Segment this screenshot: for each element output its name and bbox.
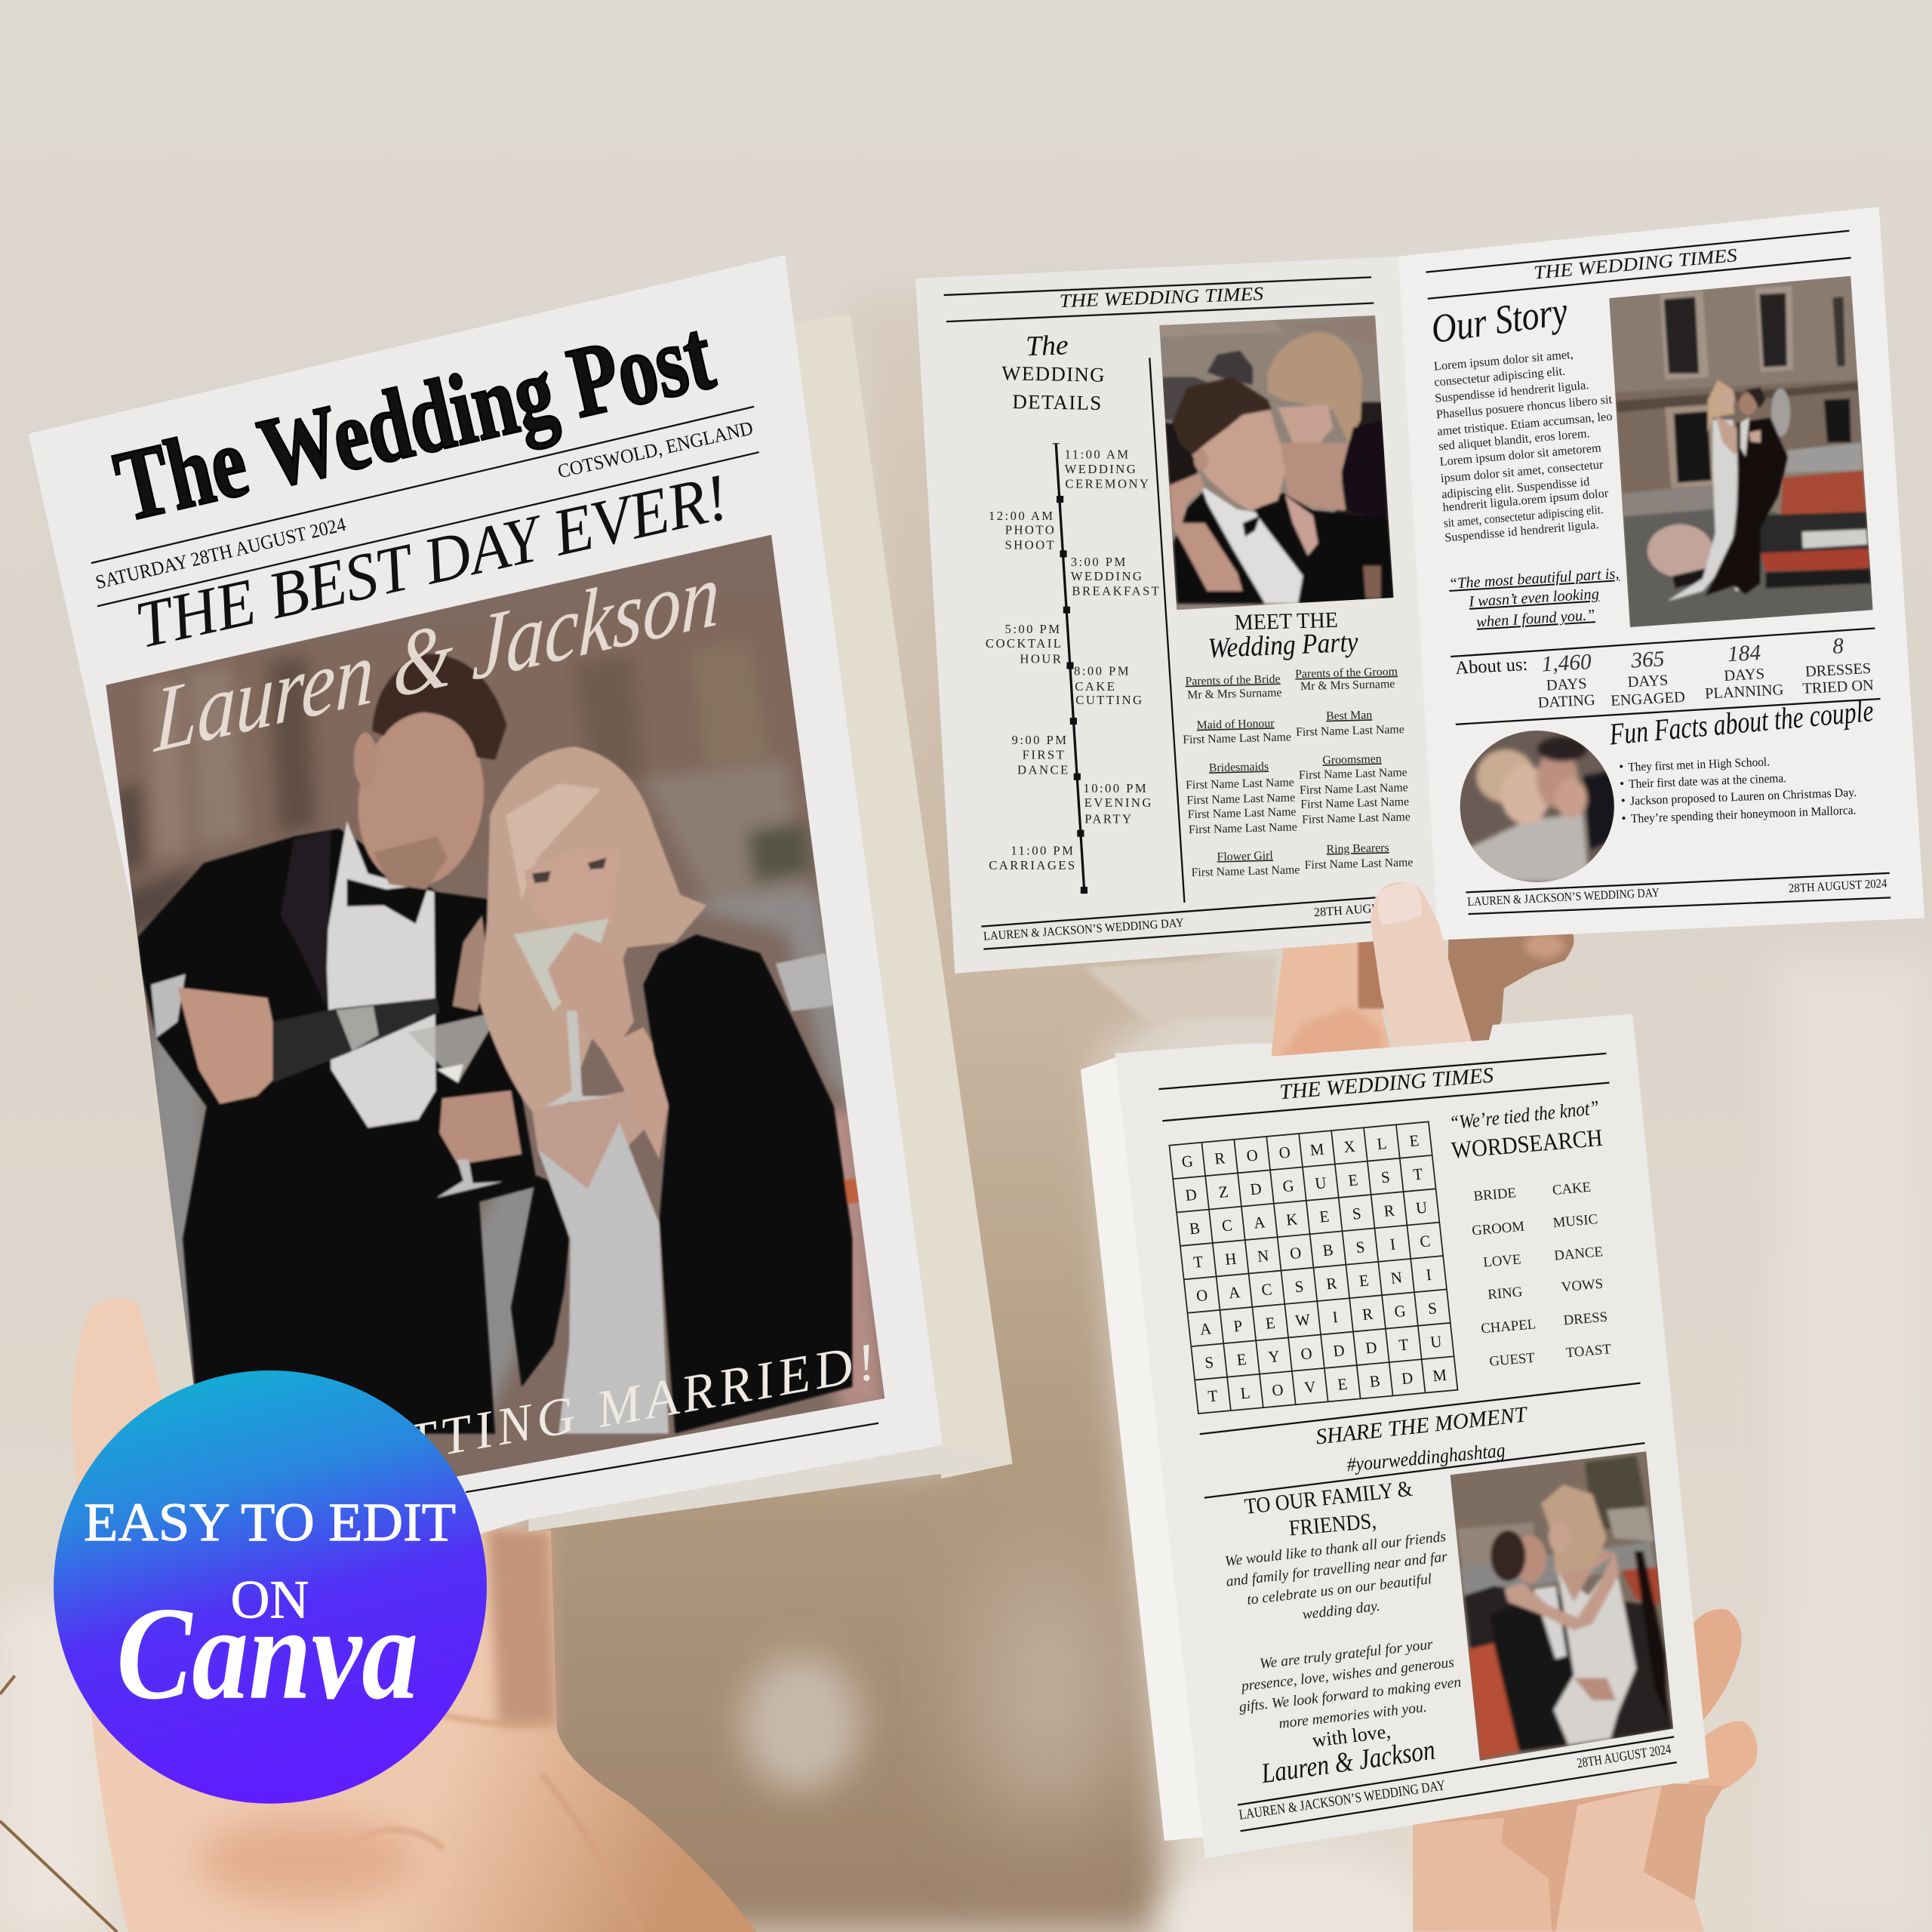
story paragraph: amet tristique. Etiam accumsan, leo bbox=[1437, 409, 1613, 438]
wordsearch grid: E bbox=[1358, 1271, 1370, 1291]
wordsearch grid: W bbox=[1294, 1310, 1311, 1330]
location: COTSWOLD, ENGLAND bbox=[555, 417, 755, 482]
word list: LOVE bbox=[1483, 1251, 1521, 1271]
footer names: LAUREN & JACKSON’S WEDDING DAY bbox=[983, 915, 1184, 943]
word list: GUEST bbox=[1489, 1350, 1536, 1370]
timeline labels: BREAKFAST bbox=[1072, 584, 1161, 598]
wordsearch grid: K bbox=[1285, 1210, 1299, 1229]
dried grass stalk bbox=[0, 1675, 117, 1932]
wordsearch grid: T bbox=[1398, 1335, 1410, 1355]
wordsearch grid: C bbox=[1221, 1216, 1233, 1235]
wordsearch grid: O bbox=[1300, 1344, 1313, 1363]
wordsearch heading: WORDSEARCH bbox=[1451, 1124, 1604, 1164]
wordsearch grid: E bbox=[1408, 1131, 1420, 1150]
badge: easy to edit on Canva bbox=[54, 1371, 487, 1804]
about us stats: 184 bbox=[1727, 641, 1761, 666]
wedding party names: First Name Last Name bbox=[1183, 731, 1291, 746]
timeline labels: 3:00 PM bbox=[1071, 555, 1128, 569]
word list: CAKE bbox=[1552, 1180, 1592, 1198]
hand fingers behind spread bbox=[1270, 928, 1574, 1069]
wordsearch grid: R bbox=[1361, 1304, 1374, 1324]
fun facts list: They first met in High School. bbox=[1628, 755, 1770, 774]
meet the party heading: Wedding Party bbox=[1208, 627, 1359, 664]
wordsearch grid: D bbox=[1401, 1368, 1414, 1388]
timeline labels: PARTY bbox=[1084, 811, 1134, 826]
story paragraph: Suspendisse id hendrerit ligula. bbox=[1434, 377, 1589, 405]
circular kiss photo bbox=[1460, 731, 1614, 882]
greeting heading: FRIENDS, bbox=[1288, 1509, 1377, 1541]
story paragraph: Phasellus posuere rhoncus libero sit bbox=[1435, 392, 1613, 421]
wordsearch grid: D bbox=[1184, 1185, 1198, 1204]
wedding party names: First Name Last Name bbox=[1304, 856, 1414, 872]
wordsearch grid: B bbox=[1189, 1219, 1201, 1238]
our story heading: Our Story bbox=[1429, 288, 1571, 352]
wordsearch grid: B bbox=[1321, 1241, 1334, 1260]
word list: DANCE bbox=[1553, 1244, 1604, 1264]
header rules bbox=[1426, 231, 1851, 299]
wedding party names: First Name Last Name bbox=[1189, 820, 1297, 836]
wordsearch grid: O bbox=[1271, 1380, 1284, 1400]
word list: GROOM bbox=[1471, 1219, 1525, 1239]
about us stats bbox=[1455, 634, 1875, 712]
stats rules bbox=[1451, 628, 1881, 724]
masthead: The Wedding Post bbox=[106, 298, 723, 543]
word list: MUSIC bbox=[1552, 1211, 1598, 1231]
thank you message bbox=[1224, 1529, 1462, 1732]
column divider bbox=[1149, 358, 1184, 903]
wordsearch grid: C bbox=[1260, 1280, 1273, 1299]
thank you message: to celebrate us on our beautiful bbox=[1246, 1571, 1433, 1608]
story paragraph: Lorem ipsum dolor sit ametorem bbox=[1439, 440, 1602, 469]
wedding party names: First Name Last Name bbox=[1296, 723, 1404, 739]
wordsearch grid: V bbox=[1303, 1377, 1317, 1397]
about us stats: About us: bbox=[1455, 654, 1528, 678]
fun facts list: • bbox=[1622, 811, 1626, 826]
wordsearch grid: E bbox=[1265, 1313, 1276, 1333]
thank you message: and family for travelling near and far bbox=[1226, 1549, 1448, 1590]
wordsearch grid: L bbox=[1376, 1134, 1388, 1153]
wordsearch grid: S bbox=[1380, 1168, 1391, 1186]
details heading bbox=[1001, 330, 1106, 414]
thumb over the spread bbox=[1371, 882, 1474, 1054]
fringed ribbon behind spread bbox=[1084, 955, 1275, 1020]
masthead rules bbox=[91, 407, 759, 606]
pull quote: I wasn’t even looking bbox=[1468, 586, 1599, 611]
photo with car bbox=[1451, 1451, 1674, 1761]
wordsearch grid: X bbox=[1343, 1137, 1356, 1156]
story paragraph: hendrerit ligula.orem ipsum dolor bbox=[1442, 485, 1609, 515]
wordsearch grid: O bbox=[1245, 1146, 1259, 1165]
about us stats: ENGAGED bbox=[1611, 689, 1685, 709]
wordsearch grid: C bbox=[1419, 1232, 1432, 1251]
timeline labels bbox=[986, 447, 1161, 872]
timeline labels: 8:00 PM bbox=[1074, 664, 1131, 678]
right hand behind back page bbox=[1413, 1609, 1757, 1931]
wordsearch grid: H bbox=[1224, 1249, 1238, 1269]
timeline labels: WEDDING bbox=[1071, 569, 1143, 583]
story paragraph: Suspendisse id hendrerit ligula. bbox=[1444, 517, 1599, 545]
wedding party names: First Name Last Name bbox=[1191, 863, 1300, 879]
header rules bbox=[1158, 1054, 1609, 1121]
wordsearch grid: P bbox=[1232, 1316, 1243, 1336]
wordsearch grid: I bbox=[1389, 1235, 1396, 1254]
badge Canva wordmark: Canva bbox=[116, 1580, 418, 1727]
wordsearch grid: T bbox=[1412, 1164, 1423, 1184]
timeline labels: EVENING bbox=[1084, 795, 1153, 810]
header title: THE WEDDING TIMES bbox=[1059, 283, 1264, 312]
wordsearch grid: S bbox=[1355, 1238, 1366, 1257]
wordsearch grid: O bbox=[1289, 1244, 1302, 1263]
greeting heading bbox=[1244, 1477, 1414, 1541]
about us stats: DATING bbox=[1537, 692, 1596, 712]
wordsearch grid: S bbox=[1352, 1204, 1362, 1223]
wedding party names: Best Man bbox=[1326, 709, 1372, 723]
wedding party names: Maid of Honour bbox=[1196, 717, 1275, 732]
wordsearch grid: T bbox=[1192, 1252, 1204, 1272]
timeline labels: 12:00 AM bbox=[989, 509, 1055, 523]
word list: BRIDE bbox=[1473, 1185, 1517, 1204]
wordsearch grid bbox=[1169, 1121, 1457, 1414]
wedding party names: First Name Last Name bbox=[1302, 811, 1411, 826]
footer rules bbox=[981, 897, 1376, 949]
wordsearch grid: G bbox=[1281, 1177, 1295, 1195]
wedding party names: First Name Last Name bbox=[1299, 766, 1407, 782]
footer names: LAUREN & JACKSON’S WEDDING DAY bbox=[1467, 885, 1660, 909]
footer date: 28TH AUGUST 2024 bbox=[1313, 897, 1423, 919]
wordsearch grid: M bbox=[1309, 1140, 1325, 1159]
about us stats: DAYS bbox=[1546, 675, 1587, 694]
wedding party names: Mr & Mrs Surname bbox=[1300, 678, 1395, 693]
word list: DRESS bbox=[1563, 1309, 1608, 1329]
timeline labels: CARRIAGES bbox=[989, 858, 1077, 872]
wordsearch grid: E bbox=[1337, 1374, 1348, 1394]
story paragraph: sit amet, consectetur adipiscing elit. bbox=[1443, 502, 1604, 530]
panel: back page stack bbox=[1081, 1014, 1709, 1858]
wordsearch grid: L bbox=[1239, 1383, 1251, 1403]
wordsearch grid: N bbox=[1257, 1246, 1269, 1266]
wordsearch grid: M bbox=[1432, 1365, 1447, 1385]
about us stats: DRESSES bbox=[1804, 660, 1872, 680]
timeline labels: CAKE bbox=[1075, 679, 1116, 694]
story paragraph bbox=[1433, 347, 1613, 545]
pull quote bbox=[1448, 565, 1620, 631]
bottom rule bbox=[466, 1423, 878, 1492]
greeting heading: TO OUR FAMILY & bbox=[1244, 1477, 1414, 1519]
fun facts list: • bbox=[1620, 777, 1624, 791]
wordsearch grid: S bbox=[1294, 1277, 1304, 1296]
hashtag: #yourweddinghashtag bbox=[1346, 1439, 1506, 1476]
wedding party names: Ring Bearers bbox=[1326, 841, 1389, 856]
panel: inside spread, left page bbox=[915, 257, 1438, 974]
wordsearch grid: A bbox=[1228, 1283, 1241, 1302]
date: SATURDAY 28TH AUGUST 2024 bbox=[94, 513, 348, 593]
wordsearch grid: N bbox=[1390, 1268, 1403, 1287]
tied the knot: “We’re tied the knot” bbox=[1448, 1097, 1600, 1134]
thank you message: gifts. We look forward to making even bbox=[1238, 1675, 1462, 1715]
footer date: 28TH AUGUST 2024 bbox=[1576, 1741, 1672, 1770]
wordsearch grid: S bbox=[1204, 1353, 1214, 1372]
wedding party names: First Name Last Name bbox=[1186, 792, 1295, 807]
header title: THE WEDDING TIMES bbox=[1533, 245, 1738, 284]
badge line two: ON bbox=[231, 1570, 309, 1630]
wordsearch grid: D bbox=[1332, 1341, 1346, 1360]
timeline labels: 9:00 PM bbox=[1012, 733, 1069, 747]
share the moment: SHARE THE MOMENT bbox=[1315, 1402, 1530, 1450]
wordsearch grid: A bbox=[1199, 1319, 1213, 1339]
headline: THE BEST DAY EVER! bbox=[129, 460, 734, 663]
panel: inside spread, right page bbox=[1398, 207, 1924, 940]
sub headline: GETTING MARRIED! bbox=[323, 1331, 884, 1487]
fun facts list bbox=[1619, 755, 1857, 826]
wordsearch grid: I bbox=[1331, 1308, 1339, 1327]
timeline labels: 5:00 PM bbox=[1005, 622, 1062, 636]
badge line one: EASY TO EDIT bbox=[84, 1492, 456, 1552]
details heading: WEDDING bbox=[1001, 361, 1106, 386]
wedding party names: Bridesmaids bbox=[1209, 760, 1269, 774]
wedding party names: Mr & Mrs Surname bbox=[1187, 686, 1282, 702]
thank you message: wedding day. bbox=[1302, 1598, 1381, 1623]
timeline labels: COCKTAIL bbox=[986, 636, 1063, 651]
about us stats: TRIED ON bbox=[1802, 677, 1875, 697]
wedding party names: Flower Girl bbox=[1217, 849, 1274, 863]
wordsearch grid: O bbox=[1278, 1143, 1291, 1162]
timeline labels: WEDDING bbox=[1065, 462, 1137, 476]
thank you message: presence, love, wishes and generous bbox=[1239, 1655, 1455, 1695]
about us stats: PLANNING bbox=[1705, 681, 1784, 703]
meet the party heading bbox=[1208, 608, 1359, 664]
timeline labels: CEREMONY bbox=[1065, 477, 1150, 491]
timeline labels: 11:00 PM bbox=[1011, 844, 1075, 858]
wedding party names: First Name Last Name bbox=[1188, 805, 1297, 821]
story paragraph: ipsum dolor sit amet, consectetur bbox=[1440, 457, 1604, 485]
couple names: Lauren & Jackson bbox=[152, 541, 721, 773]
wedding party names: First Name Last Name bbox=[1300, 795, 1409, 811]
wordsearch grid: G bbox=[1393, 1302, 1407, 1321]
about us stats: 8 bbox=[1832, 634, 1844, 659]
thank you message: We are truly grateful for your bbox=[1259, 1637, 1434, 1672]
timeline labels: 11:00 AM bbox=[1065, 447, 1131, 461]
about us stats: 365 bbox=[1630, 647, 1665, 673]
header rules bbox=[944, 277, 1374, 321]
thank you message: more memories with you. bbox=[1278, 1700, 1428, 1732]
timeline labels: HOUR bbox=[1020, 651, 1063, 666]
footer rules bbox=[1466, 873, 1890, 914]
fun facts list: • bbox=[1619, 760, 1623, 774]
wordsearch grid: A bbox=[1253, 1213, 1266, 1232]
wordsearch grid: I bbox=[1425, 1266, 1432, 1284]
timeline labels: PHOTO bbox=[1005, 523, 1056, 537]
fun facts list: • bbox=[1621, 793, 1626, 808]
wordsearch grid: U bbox=[1429, 1332, 1443, 1352]
wordsearch grid: D bbox=[1364, 1338, 1378, 1358]
wordsearch grid: R bbox=[1383, 1201, 1396, 1220]
meet the party heading: MEET THE bbox=[1234, 608, 1338, 635]
wordsearch grid: U bbox=[1415, 1198, 1428, 1217]
wordsearch grid: T bbox=[1207, 1386, 1219, 1405]
about us stats: DAYS bbox=[1627, 672, 1669, 691]
wordsearch grid: R bbox=[1214, 1149, 1226, 1168]
word list: TOAST bbox=[1565, 1341, 1612, 1361]
wordsearch grid: E bbox=[1236, 1350, 1247, 1369]
wedding party names: First Name Last Name bbox=[1186, 776, 1294, 792]
story paragraph: Lorem ipsum dolor sit amet, bbox=[1433, 347, 1574, 374]
signature: Lauren & Jackson bbox=[1259, 1734, 1437, 1789]
timeline labels: FIRST bbox=[1023, 748, 1066, 762]
share rules bbox=[1200, 1383, 1644, 1498]
thank you message: We would like to thank all our friends bbox=[1224, 1529, 1447, 1570]
pull quote: when I found you.” bbox=[1476, 607, 1595, 631]
wordsearch grid: B bbox=[1369, 1371, 1381, 1391]
wordsearch grid: U bbox=[1314, 1174, 1327, 1192]
wordsearch grid: Z bbox=[1218, 1183, 1229, 1201]
word list: CHAPEL bbox=[1480, 1316, 1537, 1337]
wedding party names: Parents of the Bride bbox=[1185, 672, 1281, 688]
story paragraph: adipiscing elit. Suspendisse id bbox=[1441, 474, 1590, 501]
pull quote: “The most beautiful part is, bbox=[1448, 565, 1620, 592]
wordsearch grid: O bbox=[1195, 1286, 1208, 1305]
panel: front page The Wedding Post bbox=[29, 255, 1013, 1593]
woman bbox=[479, 746, 707, 1112]
story paragraph: sed aliquet blandit, eros lorem. bbox=[1438, 426, 1590, 454]
wordsearch grid: S bbox=[1427, 1299, 1438, 1318]
timeline labels: 10:00 PM bbox=[1083, 781, 1148, 795]
front card back page bbox=[792, 314, 1013, 1478]
fun facts list: Their first date was at the cinema. bbox=[1629, 771, 1786, 791]
fun facts list: Jackson proposed to Lauren on Christmas Day. bbox=[1630, 785, 1857, 808]
word list bbox=[1471, 1180, 1612, 1370]
about us stats: DAYS bbox=[1724, 666, 1765, 685]
wordsearch grid: D bbox=[1249, 1180, 1263, 1198]
footer names: LAUREN & JACKSON’S WEDDING DAY bbox=[1238, 1777, 1447, 1823]
timeline labels: CUTTING bbox=[1075, 693, 1143, 707]
wordsearch grid: R bbox=[1325, 1274, 1338, 1294]
word list: RING bbox=[1487, 1284, 1523, 1303]
wedding party names: First Name Last Name bbox=[1300, 781, 1408, 797]
footer rules bbox=[1238, 1737, 1677, 1831]
timeline bbox=[1052, 444, 1087, 894]
wordsearch grid: G bbox=[1181, 1152, 1194, 1171]
footer date: 28TH AUGUST 2024 bbox=[1789, 876, 1887, 895]
wedding party names: Groomsmen bbox=[1322, 752, 1382, 767]
details heading: The bbox=[1025, 330, 1069, 362]
fun facts list: They’re spending their honeymoon in Mallorca. bbox=[1631, 803, 1857, 826]
couple portrait photo bbox=[1159, 315, 1393, 610]
cover photo bbox=[106, 534, 884, 1476]
header title: THE WEDDING TIMES bbox=[1278, 1064, 1494, 1104]
wordsearch grid: E bbox=[1347, 1171, 1358, 1189]
word list: VOWS bbox=[1561, 1276, 1604, 1295]
man suit bbox=[138, 829, 537, 1434]
story paragraph: consectetur adipiscing elit. bbox=[1433, 364, 1566, 389]
with love: with love, bbox=[1311, 1720, 1392, 1752]
about us stats: 1,460 bbox=[1541, 650, 1592, 677]
wordsearch grid: Y bbox=[1267, 1347, 1281, 1366]
wedding party names bbox=[1183, 666, 1414, 879]
details heading: DETAILS bbox=[1012, 390, 1103, 414]
left hand holding front card bbox=[72, 1299, 756, 1932]
wordsearch grid: E bbox=[1318, 1207, 1330, 1226]
timeline labels: DANCE bbox=[1017, 762, 1070, 777]
wedding photo with red car bbox=[1609, 276, 1873, 627]
wedding party names: Parents of the Groom bbox=[1295, 666, 1398, 681]
timeline labels: SHOOT bbox=[1004, 537, 1056, 552]
